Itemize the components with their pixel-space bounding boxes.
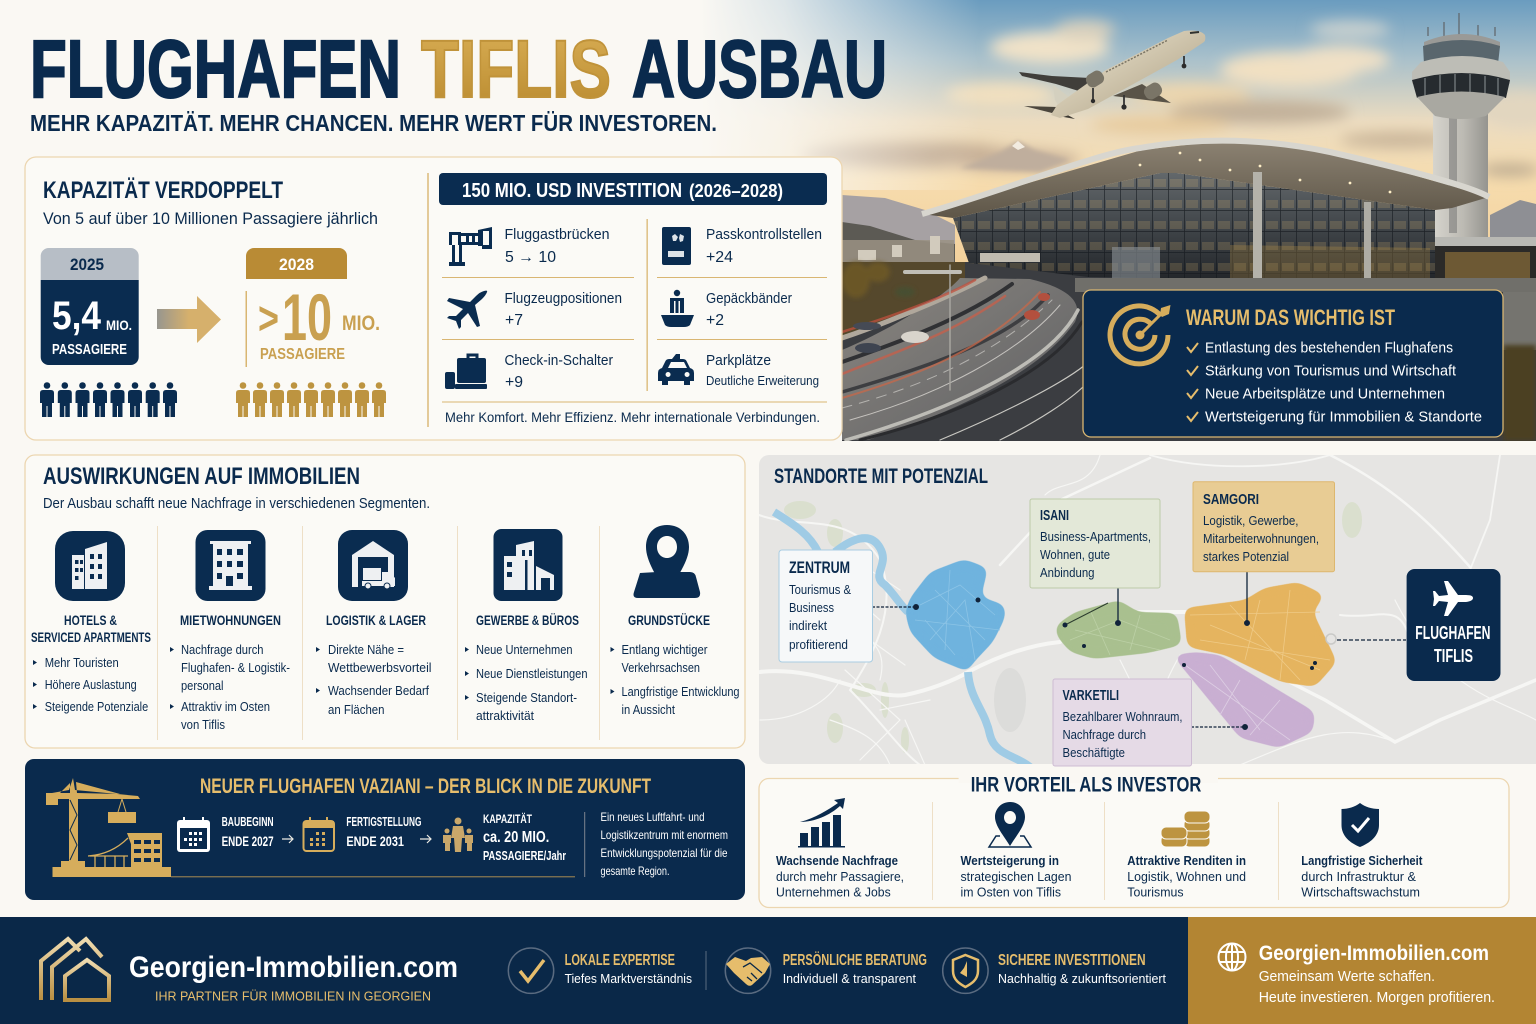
icon: warehouse and truck <box>338 530 408 601</box>
row: Gepaeckbaender: +2 <box>706 312 724 329</box>
callout: Zentrum: profitierend <box>789 637 848 652</box>
callout: Varketili: VARKETILI <box>1062 687 1119 704</box>
column: commercial and offices <box>465 529 588 723</box>
banner: investment: (2026–2028) <box>689 181 783 201</box>
column: commercial and offices: Neue Dienstleistungen <box>476 666 588 681</box>
control tower <box>1412 13 1510 238</box>
benefit: security: durch Infrastruktur & <box>1301 870 1417 884</box>
column: rental apartments: Nachfrage durch <box>181 642 264 657</box>
heading: why it matters: WARUM DAS WICHTIG IST <box>1186 305 1395 330</box>
benefit: security: Langfristige Sicherheit <box>1301 854 1423 868</box>
hero photo: airport terminal at sunset <box>700 0 1536 441</box>
column: land plots: Langfristige Entwicklung <box>622 684 740 699</box>
column: land plots: Entlang wichtiger <box>622 642 708 657</box>
tagline: Mehr Komfort. Mehr Effizienz. Mehr internationale Verbindungen. <box>445 409 820 425</box>
column: rental apartments: Flughafen- & Logistik- <box>181 660 290 675</box>
milestone: completion: FERTIGSTELLUNG <box>346 814 421 829</box>
feature: local expertise <box>508 948 692 993</box>
benefit: value growth: strategischen Lagen <box>960 870 1072 884</box>
icon: globe <box>1218 944 1246 970</box>
brand tagline: IHR PARTNER FÜR IMMOBILIEN IN GEORGIEN <box>155 989 431 1004</box>
card: 2025: 2025 <box>70 256 104 274</box>
column: logistics: LOGISTIK & LAGER <box>326 613 426 628</box>
footer <box>0 917 1536 1024</box>
panel: capacity and investment <box>25 157 842 440</box>
icon: airplane <box>447 291 487 329</box>
panel: call to action: Heute investieren. Morgen profitieren. <box>1259 990 1495 1006</box>
benefit: growing demand: Unternehmen & Jobs <box>776 886 891 900</box>
callout: Samgori: Mitarbeiterwohnungen, <box>1203 531 1319 546</box>
column: land plots <box>610 525 740 717</box>
icon: people <box>443 818 473 852</box>
arrow <box>282 835 293 843</box>
benefit: returns: Logistik, Wohnen und <box>1127 870 1246 884</box>
icon: hotel <box>55 531 125 601</box>
column: logistics: Wachsender Bedarf <box>328 683 429 698</box>
connector lines <box>872 571 1406 730</box>
card: 2025 <box>41 248 139 365</box>
heading: Vaziani: NEUER FLUGHAFEN VAZIANI – DER BLICK IN DIE ZUKUNFT <box>200 775 651 798</box>
callout: Isani: Business-Apartments, <box>1040 529 1151 544</box>
column: rental apartments: von Tiflis <box>181 717 225 732</box>
heading: real estate impact: AUSWIRKUNGEN AUF IMMOBILIEN <box>43 463 360 490</box>
stat: capacity: PASSAGIERE/Jahr <box>483 848 566 863</box>
panel: call to action <box>1188 917 1536 1024</box>
panel: map of locations <box>759 455 1536 767</box>
benefit: growing demand: Wachsende Nachfrage <box>776 854 898 868</box>
people icons: 2025 <box>40 382 177 417</box>
district: Isani <box>1056 600 1182 659</box>
milestone: construction start: BAUBEGINN <box>222 814 274 829</box>
card: 2028: 10 <box>282 280 332 354</box>
title <box>30 24 887 115</box>
checklist: Neue Arbeitsplätze und Unternehmen <box>1205 386 1445 403</box>
description <box>600 810 728 878</box>
callout: Zentrum: Tourismus & <box>789 582 851 597</box>
icon: office buildings <box>494 529 562 601</box>
river <box>774 512 1030 767</box>
row: Fluggastbruecken: 5 → 10 <box>505 249 556 266</box>
panel: real estate impact <box>25 455 745 748</box>
description: gesamte Region. <box>600 864 670 878</box>
callout: Zentrum <box>779 550 872 662</box>
icon: target <box>1110 305 1170 364</box>
icon: passenger bridge <box>449 227 492 266</box>
callout: Samgori: Logistik, Gewerbe, <box>1203 513 1298 528</box>
row: Passkontrollstellen: +24 <box>706 249 733 266</box>
callout: Zentrum: indirekt <box>789 618 827 633</box>
column: rental apartments: personal <box>181 678 224 693</box>
row: Parkplaetze: Parkplätze <box>706 352 771 369</box>
people icons: 2028 <box>236 382 386 417</box>
benefit: returns: Attraktive Renditen in <box>1127 854 1246 868</box>
column: rental apartments: Attraktiv im Osten <box>181 699 270 714</box>
callout: Varketili: Nachfrage durch <box>1062 727 1146 742</box>
district: Varketili <box>1172 652 1315 748</box>
icon: baggage belt <box>661 290 694 327</box>
card: 2025: PASSAGIERE <box>52 342 127 358</box>
column: land plots: Verkehrsachsen <box>622 660 700 675</box>
description: Entwicklungspotenzial für die <box>600 846 728 860</box>
card: 2025: 5,4 <box>52 294 102 338</box>
feature: personal consulting: Individuell & transparent <box>783 971 916 986</box>
checklist: Wertsteigerung für Immobilien & Standorte <box>1205 409 1482 426</box>
milestone: construction start: ENDE 2027 <box>222 833 274 849</box>
callout: Zentrum: Business <box>789 600 834 615</box>
row: Flugzeugpositionen: +7 <box>505 312 523 329</box>
banner: investment: 150 MIO. USD INVESTITION <box>462 179 682 202</box>
callout: Samgori <box>1193 482 1334 572</box>
right side ground and trees <box>1503 290 1536 350</box>
title: FLUGHAFEN <box>30 24 401 115</box>
roads <box>759 455 1536 765</box>
mountains <box>960 141 1070 172</box>
stat: capacity <box>483 811 566 863</box>
panel: call to action: Gemeinsam Werte schaffen. <box>1259 969 1435 985</box>
stat: capacity: ca. 20 MIO. <box>483 829 549 846</box>
column: land plots: in Aussicht <box>622 702 675 717</box>
column: commercial and offices: Steigende Standort- <box>476 690 577 705</box>
heading: locations: STANDORTE MIT POTENZIAL <box>774 465 988 488</box>
milestone: construction start <box>177 814 274 852</box>
feature: secure investments: Nachhaltig & zukunftsorientiert <box>998 971 1166 986</box>
icon: map pin <box>989 802 1031 847</box>
callout: Samgori: SAMGORI <box>1203 491 1259 508</box>
column: hotels: Steigende Potenziale <box>45 699 148 714</box>
arrow <box>157 296 221 343</box>
benefit: growing demand: durch mehr Passagiere, <box>776 870 904 884</box>
card: 2028: PASSAGIERE <box>260 346 345 363</box>
column: land plots: GRUNDSTÜCKE <box>628 613 710 628</box>
callout: Isani: ISANI <box>1040 507 1069 524</box>
subtitle: MEHR KAPAZITÄT. MEHR CHANCEN. MEHR WERT FÜR INVESTOREN. <box>30 110 717 136</box>
row: Passkontrollstellen <box>706 226 822 266</box>
benefit: security: Wirtschaftswachstum <box>1301 886 1420 900</box>
heading: investor benefits: IHR VORTEIL ALS INVESTOR <box>971 774 1201 797</box>
row: Check-in-Schalter: Check-in-Schalter <box>504 352 613 369</box>
feature: personal consulting: PERSÖNLICHE BERATUNG <box>783 950 927 969</box>
column: hotels: SERVICED APARTMENTS <box>31 630 151 645</box>
column: commercial and offices: GEWERBE & BÜROS <box>476 613 579 628</box>
callout: Tbilisi airport <box>1407 569 1500 681</box>
milestone: completion: ENDE 2031 <box>346 833 404 849</box>
icon: car <box>658 354 694 385</box>
card: 2028 <box>246 248 380 367</box>
callout: Isani: Anbindung <box>1040 565 1094 580</box>
illustration: crane and building <box>46 778 171 877</box>
icon: apartment block <box>196 530 266 601</box>
impact subheading: Der Ausbau schafft neue Nachfrage in verschiedenen Segmenten. <box>43 496 430 512</box>
callout: Varketili: Bezahlbarer Wohnraum, <box>1062 709 1182 724</box>
row: Gepaeckbaender <box>706 290 792 329</box>
description: Ein neues Luftfahrt- und <box>600 810 704 824</box>
benefit: value growth: Wertsteigerung in <box>960 854 1059 868</box>
airplane <box>1019 30 1205 119</box>
row: Parkplaetze: Deutliche Erweiterung <box>706 373 819 388</box>
card: 2028: 2028 <box>279 256 314 274</box>
callout: Samgori: starkes Potenzial <box>1203 549 1289 564</box>
column: logistics: an Flächen <box>328 702 384 717</box>
column: rental apartments: MIETWOHNUNGEN <box>180 613 281 628</box>
feature: local expertise: Tiefes Marktverständnis <box>565 971 692 986</box>
feature: secure investments <box>943 948 1166 993</box>
arrow <box>420 835 431 843</box>
checklist: Entlastung des bestehenden Flughafens <box>1205 340 1453 357</box>
icon: location pin <box>634 525 700 598</box>
heading: capacity: KAPAZITÄT VERDOPPELT <box>43 177 283 204</box>
card: 2028: > <box>258 292 279 344</box>
feature: local expertise: LOKALE EXPERTISE <box>565 952 675 969</box>
column: hotels <box>31 531 151 714</box>
panel: call to action: Georgien-Immobilien.com <box>1259 942 1489 965</box>
panel: investor benefits <box>759 774 1509 908</box>
green spaces <box>784 501 1362 753</box>
column: logistics <box>316 530 432 717</box>
icon: passport control <box>662 227 691 265</box>
row: Flugzeugpositionen <box>504 290 622 329</box>
card: 2028: MIO. <box>342 312 380 335</box>
icon: shield <box>1342 803 1379 847</box>
milestone: completion <box>304 814 421 851</box>
row: Flugzeugpositionen: Flugzeugpositionen <box>504 290 622 307</box>
district: Samgori <box>1184 582 1337 687</box>
callout: Tbilisi airport: FLUGHAFEN <box>1415 623 1490 643</box>
card: 2025: MIO. <box>106 317 132 333</box>
ground and highway <box>842 262 1536 441</box>
district: Zentrum <box>905 559 1005 672</box>
icon: growth chart <box>798 798 845 848</box>
title: AUSBAU <box>632 24 887 115</box>
panel: Vaziani future airport <box>25 759 745 900</box>
callout: Tbilisi airport: TIFLIS <box>1434 646 1473 666</box>
callout: Zentrum: ZENTRUM <box>789 559 850 577</box>
capacity subheading: Von 5 auf über 10 Millionen Passagiere jährlich <box>43 209 378 228</box>
panel: why it matters <box>1083 290 1503 437</box>
logo icon: houses <box>41 939 109 1000</box>
checklist <box>1187 340 1482 426</box>
row: Gepaeckbaender: Gepäckbänder <box>706 290 792 307</box>
row: Fluggastbruecken <box>504 226 610 266</box>
icon: check-in baggage <box>445 354 487 389</box>
benefit: value growth <box>960 802 1072 900</box>
terminal building <box>922 140 1536 292</box>
feature: personal consulting <box>725 948 927 993</box>
benefit: returns <box>1127 811 1246 900</box>
column: hotels: Höhere Auslastung <box>45 677 137 692</box>
icon: coins <box>1161 811 1210 847</box>
benefit: value growth: im Osten von Tiflis <box>960 886 1061 900</box>
column: hotels: HOTELS & <box>64 613 117 628</box>
callout: Varketili: Beschäftigte <box>1062 745 1125 760</box>
callout: Varketili <box>1053 679 1192 766</box>
stat: capacity: KAPAZITÄT <box>483 811 532 826</box>
distant city left of terminal <box>842 240 954 264</box>
banner: investment <box>439 173 827 205</box>
checklist: Stärkung von Tourismus und Wirtschaft <box>1205 363 1457 380</box>
feature: secure investments: SICHERE INVESTITIONEN <box>998 952 1146 969</box>
column: commercial and offices: attraktivität <box>476 708 534 723</box>
row: Check-in-Schalter: +9 <box>505 374 523 391</box>
column: logistics: Direkte Nähe = <box>328 642 404 657</box>
column: commercial and offices: Neue Unternehmen <box>476 642 572 657</box>
column: hotels: Mehr Touristen <box>45 655 119 670</box>
brand name: Georgien-Immobilien.com <box>129 951 458 984</box>
title: TIFLIS <box>421 24 611 115</box>
row: Check-in-Schalter <box>504 352 613 391</box>
column: logistics: Wettbewerbsvorteil <box>328 660 432 675</box>
row: Fluggastbruecken: Fluggastbrücken <box>504 226 610 243</box>
description: Logistikzentrum mit enormem <box>600 828 728 842</box>
callout: Isani: Wohnen, gute <box>1040 547 1110 562</box>
row: Passkontrollstellen: Passkontrollstellen <box>706 226 822 243</box>
callout: Isani <box>1030 499 1160 588</box>
column: rental apartments <box>170 530 290 732</box>
row: Parkplaetze <box>706 352 819 388</box>
benefit: growing demand <box>776 798 904 900</box>
benefit: returns: Tourismus <box>1127 886 1184 900</box>
benefit: security <box>1301 803 1423 900</box>
